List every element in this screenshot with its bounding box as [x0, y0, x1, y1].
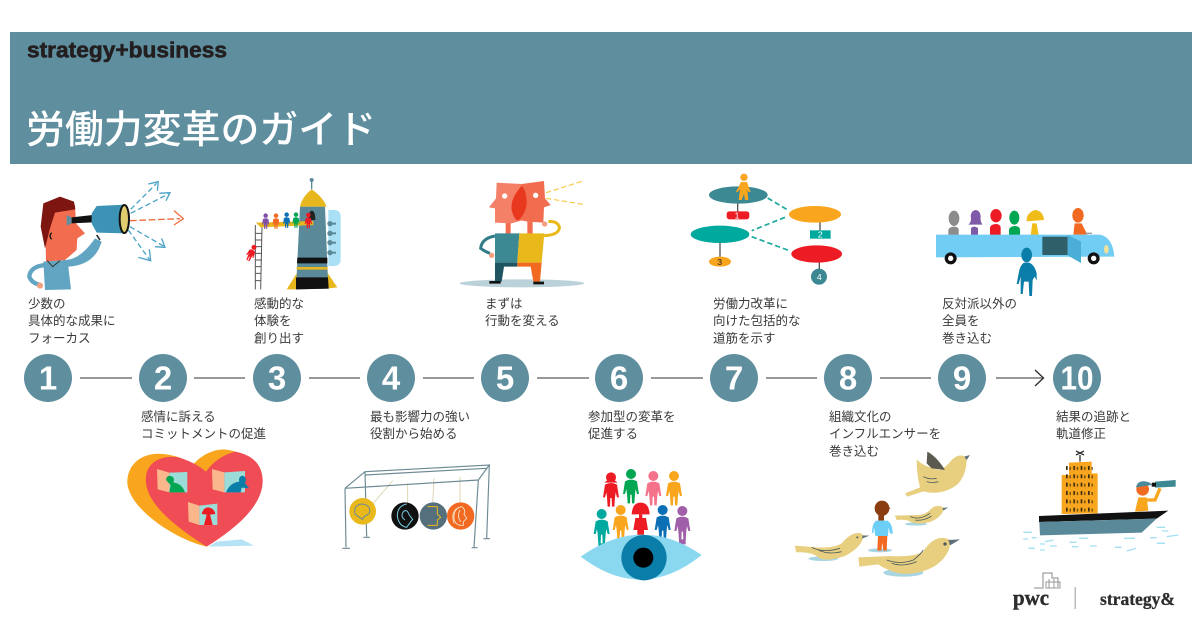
- timeline: numbered steps: 8: [839, 360, 857, 396]
- text: step 4: 役割から始める: [370, 426, 458, 441]
- text: step 3: 創り出す: [254, 331, 304, 345]
- text: step 10: 結果の追跡と: [1056, 410, 1131, 424]
- logo divider: [1074, 587, 1076, 609]
- text: step 8: インフルエンサーを: [829, 427, 941, 441]
- text: step 1: フォーカス: [28, 331, 91, 345]
- timeline: numbered steps: 1: [39, 360, 57, 396]
- text: step 3: 体験を: [254, 313, 292, 328]
- icon: rocket: [244, 178, 341, 289]
- text: step 6: 参加型の変革を: [588, 410, 676, 424]
- timeline: numbered steps: 6: [610, 360, 628, 396]
- icon: branching path diagram: 2: [818, 230, 823, 240]
- icon: branching path diagram: [691, 174, 842, 285]
- icon: two-faced figure: [460, 181, 584, 287]
- timeline: numbered steps: 9: [953, 360, 971, 396]
- text: step 1: 少数の: [28, 297, 66, 311]
- text: step 8: 組織文化の: [829, 410, 892, 424]
- logo: PwC: [1013, 573, 1060, 610]
- timeline: numbered steps: 5: [496, 360, 514, 396]
- icon: newton's cradle with faces: [342, 465, 490, 548]
- timeline connectors: [80, 370, 1044, 386]
- icon: heart with windows: [127, 449, 263, 547]
- text: step 9: 巻き込む: [942, 331, 992, 345]
- text: step 1: 具体的な成果に: [28, 313, 116, 328]
- timeline: numbered steps: 10: [1060, 360, 1094, 396]
- timeline: numbered steps: [24, 354, 1101, 402]
- text: step 9: 反対派以外の: [942, 297, 1017, 311]
- text: step 7: 向けた包括的な: [713, 313, 801, 328]
- icon: man with binoculars: [29, 182, 183, 290]
- icon: branching path diagram: 3: [717, 257, 722, 267]
- icon: limousine with passengers: [936, 208, 1114, 296]
- text: step 9: 全員を: [942, 314, 980, 328]
- timeline: numbered steps: 2: [154, 360, 172, 396]
- icon: eye with crowd: [581, 469, 702, 580]
- text: step 3: 感動的な: [254, 297, 304, 311]
- text: step 10: 軌道修正: [1056, 426, 1106, 441]
- text: step 6: 促進する: [588, 427, 638, 441]
- timeline: numbered steps: 3: [268, 360, 286, 396]
- text: step 8: 巻き込む: [829, 444, 879, 458]
- logo: strategy&: strategy&: [1100, 589, 1175, 609]
- header banner: [10, 32, 1192, 164]
- text: step 7: 労働力改革に: [713, 297, 788, 311]
- text: step 5: 行動を変える: [485, 313, 560, 328]
- text: step 7: 道筋を示す: [713, 330, 776, 345]
- icon: branching path diagram: 1: [735, 210, 740, 220]
- text: step 5: まずは: [485, 297, 523, 311]
- icon: branching path diagram: 4: [817, 272, 822, 282]
- logo: PwC: pwc: [1013, 585, 1049, 610]
- timeline: numbered steps: 4: [382, 360, 401, 396]
- title: 労働力変革のガイド: [26, 99, 376, 155]
- text: step 2: 感情に訴える: [141, 410, 216, 424]
- icon: boat with building and lookout: [1023, 451, 1178, 551]
- icon: birds following a man: [795, 452, 970, 577]
- timeline: numbered steps: 7: [725, 360, 743, 396]
- text: step 2: コミットメントの促進: [141, 427, 267, 441]
- text: step 4: 最も影響力の強い: [370, 410, 470, 424]
- brand wordmark: strategy+business: [27, 38, 227, 62]
